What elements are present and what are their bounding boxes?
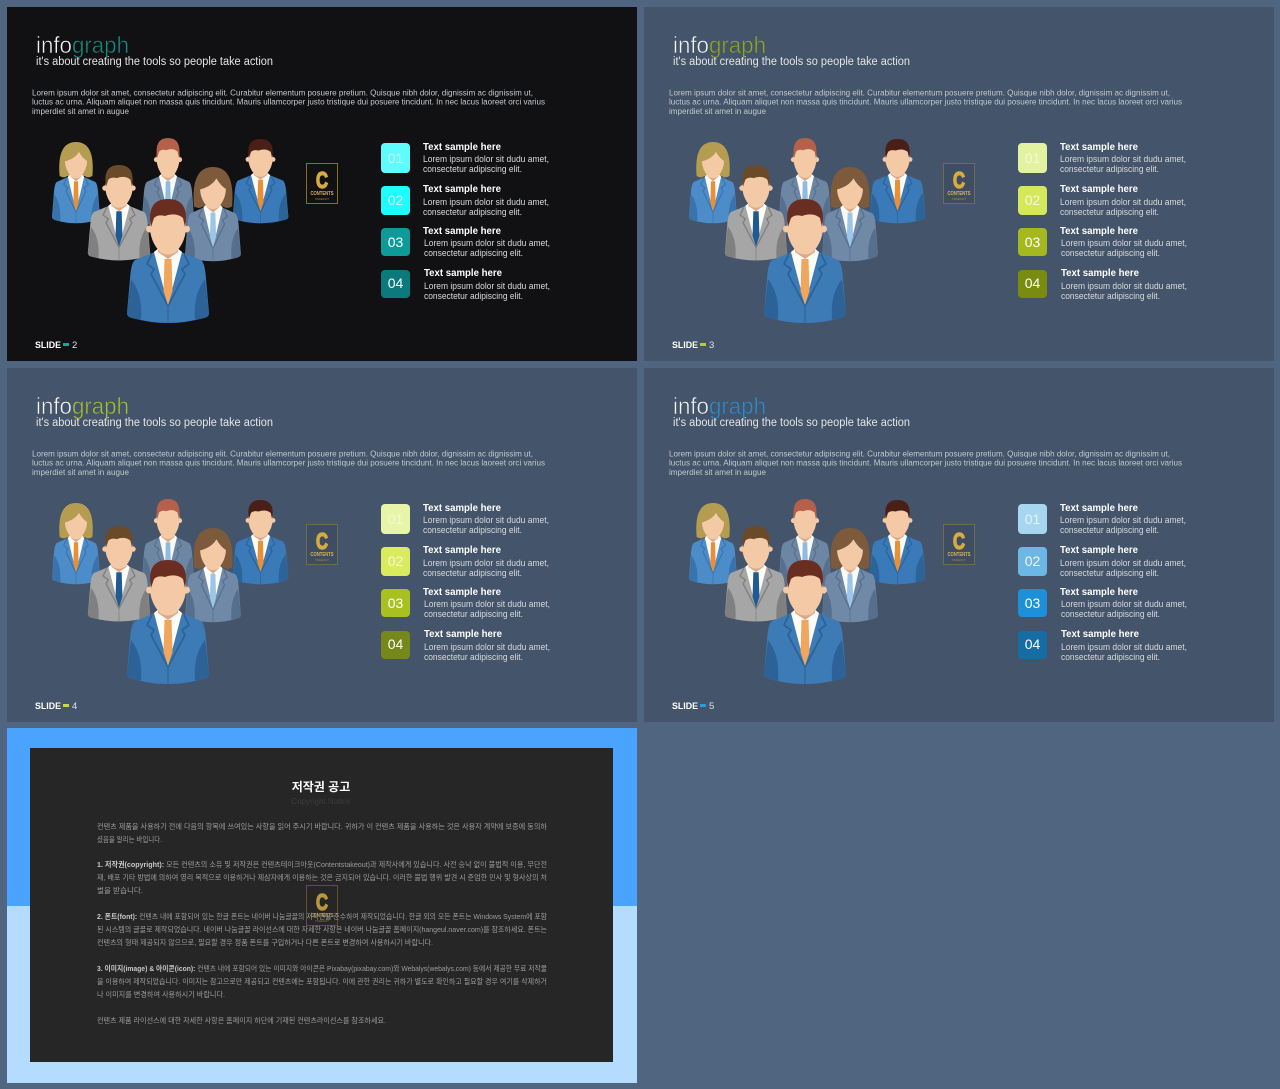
notice clause 3: image and icon: 나 이미지를 변경하여 사용하시기 바랍니다. <box>97 990 225 999</box>
intro paragraph: Lorem ipsum dolor sit amet, consectetur adipiscing elit. Curabitur elementum posuere pretium. Quisque nibh dolor, dignissim ac dignissim ut, <box>669 448 1170 458</box>
list item 04: consectetur adipiscing elit. <box>1061 291 1160 301</box>
subtitle: it's about creating the tools so people take action <box>673 56 910 68</box>
title: infograph <box>36 393 129 419</box>
list item 02: 02 <box>388 553 403 569</box>
icon: contents logo: C <box>316 528 328 554</box>
list item 03: Text sample here <box>423 587 501 598</box>
slide number: 2 <box>72 340 77 351</box>
list item 04: Lorem ipsum dolor sit dudu amet, <box>424 642 550 652</box>
icon: contents logo: TAKEOUT <box>952 558 966 562</box>
panel: slide 2 <box>7 7 637 361</box>
list item 01: Lorem ipsum dolor sit dudu amet, <box>423 515 549 525</box>
list item 04 <box>1018 629 1187 662</box>
list item 01: consectetur adipiscing elit. <box>423 164 522 174</box>
list item 03: consectetur adipiscing elit. <box>1061 248 1160 258</box>
panel: copyright notice slide <box>7 728 637 1083</box>
icon: contents logo watermark: CONTENTS <box>310 913 334 919</box>
notice subheading: Copyright Notice <box>291 797 351 806</box>
list item 03 <box>1018 226 1187 258</box>
title: infograph <box>36 32 129 58</box>
icon: contents logo watermark <box>306 886 338 926</box>
icon: contents logo: CONTENTS <box>948 552 971 558</box>
intro paragraph: imperdiet sit amet in augue <box>669 106 766 116</box>
list item 01: consectetur adipiscing elit. <box>423 525 522 535</box>
icon: contents logo <box>306 524 338 564</box>
intro paragraph: luctus ac urna. Aliquam aliquet non massa quis tincidunt. Mauris ullamcorper justo tristique dui posuere tincidunt. In nec lacus laoreet orci varius <box>32 96 545 106</box>
list item 04: consectetur adipiscing elit. <box>424 652 523 662</box>
list item 02: Text sample here <box>423 545 501 556</box>
list item 02 <box>1018 184 1186 217</box>
list item 02: Lorem ipsum dolor sit dudu amet, <box>1060 558 1186 568</box>
panel: slide 4 <box>7 368 637 722</box>
list item 01: 01 <box>1025 150 1040 166</box>
notice clause 1: copyright <box>97 860 547 895</box>
list item 01: Lorem ipsum dolor sit dudu amet, <box>1060 154 1186 164</box>
list item 03: 03 <box>1025 595 1040 611</box>
list item 04 <box>381 629 550 662</box>
list item 02: consectetur adipiscing elit. <box>1060 568 1159 578</box>
icon: contents logo <box>944 164 974 204</box>
list item 01: consectetur adipiscing elit. <box>1060 164 1159 174</box>
intro paragraph: luctus ac urna. Aliquam aliquet non massa quis tincidunt. Mauris ullamcorper justo tristique dui posuere tincidunt. In nec lacus laoreet orci varius <box>32 458 545 468</box>
list item 01: Text sample here <box>423 142 501 153</box>
notice clause 2: font: 컨텐츠의 형태 제공되지 않으므로, 필요할 경우 정품 폰트를 구입하거나 다른 폰트로 변경하여 사용하시기 바랍니다. <box>97 938 433 947</box>
list item 03: Text sample here <box>423 226 501 237</box>
icon: contents logo watermark: TAKEOUT <box>315 919 329 923</box>
list item 01 <box>381 503 549 535</box>
slide number: 5 <box>709 701 714 712</box>
list item 02: 02 <box>388 192 403 208</box>
slide number: SLIDE <box>35 701 61 712</box>
list item 02: consectetur adipiscing elit. <box>423 568 522 578</box>
notice clause 1: copyright: 벌을 받습니다. <box>97 886 143 895</box>
list item 01 <box>381 142 549 174</box>
list item 03: Lorem ipsum dolor sit dudu amet, <box>1061 238 1187 248</box>
list item 03 <box>381 226 550 258</box>
list item 02: Text sample here <box>1060 184 1138 195</box>
list item 02: Text sample here <box>1060 545 1138 556</box>
intro paragraph <box>32 88 545 116</box>
list item 02 <box>1018 545 1186 578</box>
intro paragraph: Lorem ipsum dolor sit amet, consectetur adipiscing elit. Curabitur elementum posuere pretium. Quisque nibh dolor, dignissim ac dignissim ut, <box>32 88 533 98</box>
slide number <box>672 701 714 712</box>
list item 01: Lorem ipsum dolor sit dudu amet, <box>1060 515 1186 525</box>
list item 04: 04 <box>1025 636 1040 652</box>
notice clause 2: font <box>97 912 547 947</box>
intro paragraph: imperdiet sit amet in augue <box>669 467 766 477</box>
icon: contents logo: TAKEOUT <box>952 197 966 201</box>
intro paragraph: luctus ac urna. Aliquam aliquet non massa quis tincidunt. Mauris ullamcorper justo tristique dui posuere tincidunt. In nec lacus laoreet orci varius <box>669 458 1182 468</box>
list item 03 <box>1018 587 1187 619</box>
list item 03: Lorem ipsum dolor sit dudu amet, <box>424 599 550 609</box>
slide number <box>672 340 714 351</box>
list item 01: consectetur adipiscing elit. <box>1060 525 1159 535</box>
notice footer: 컨텐츠 제품 라이선스에 대한 자세한 사항은 홈페이지 하단에 기재된 컨텐츠라이선스를 참조하세요. <box>97 1016 386 1025</box>
list item 02: 02 <box>1025 192 1040 208</box>
icon: contents logo: TAKEOUT <box>315 197 329 201</box>
list item 02: Text sample here <box>423 184 501 195</box>
notice clause 2: font: 2. 폰트(font): 컨텐츠 내에 포함되어 있는 한글 폰트는 네이버 나눔글꼴의 저작권을 준수하여 제작되었습니다. 한글 외의 모든 폰트는 Windows System에 포함 <box>97 912 547 921</box>
list item 04: 04 <box>388 636 403 652</box>
list item 02 <box>381 184 549 217</box>
title: infograph <box>673 32 766 58</box>
list item 03: consectetur adipiscing elit. <box>424 609 523 619</box>
slide number: SLIDE <box>672 701 698 712</box>
notice heading: 저작권 공고 <box>292 779 350 794</box>
subtitle: it's about creating the tools so people take action <box>673 417 910 429</box>
intro paragraph <box>669 88 1182 116</box>
list item 04: consectetur adipiscing elit. <box>1061 652 1160 662</box>
list item 01: Text sample here <box>1060 503 1138 514</box>
notice clause 3: image and icon: 3. 이미지(image) & 아이콘(icon): 컨텐츠 내에 포함되어 있는 이미지와 아이콘은 Pixabay(pixabay.com)와 Webalys(webalys.com) 등에서 제공한 무료 저작물 <box>97 964 547 973</box>
list item 03: 03 <box>1025 234 1040 250</box>
icon: contents logo: TAKEOUT <box>315 558 329 562</box>
list item 02: consectetur adipiscing elit. <box>1060 207 1159 217</box>
list item 03: Text sample here <box>1060 226 1138 237</box>
intro paragraph <box>32 448 545 477</box>
icon: business people group <box>689 499 925 684</box>
notice clause 3: image and icon <box>97 964 547 999</box>
list item 03 <box>381 587 550 619</box>
slide number: 4 <box>72 701 77 712</box>
list item 03: consectetur adipiscing elit. <box>1061 609 1160 619</box>
intro paragraph: Lorem ipsum dolor sit amet, consectetur adipiscing elit. Curabitur elementum posuere pretium. Quisque nibh dolor, dignissim ac dignissim ut, <box>669 88 1170 98</box>
icon: contents logo: C <box>316 167 328 193</box>
list item 03: Lorem ipsum dolor sit dudu amet, <box>1061 599 1187 609</box>
subtitle: it's about creating the tools so people take action <box>36 56 273 68</box>
list item 04 <box>381 268 550 301</box>
panel: slide 3 <box>644 7 1274 361</box>
intro paragraph: Lorem ipsum dolor sit amet, consectetur adipiscing elit. Curabitur elementum posuere pretium. Quisque nibh dolor, dignissim ac dignissim ut, <box>32 448 533 458</box>
panel: slide 5 <box>644 368 1274 722</box>
list item 04: consectetur adipiscing elit. <box>424 291 523 301</box>
list item 01: 01 <box>388 511 403 527</box>
list item 02: Lorem ipsum dolor sit dudu amet, <box>423 558 549 568</box>
list item 01: Text sample here <box>423 503 501 514</box>
notice intro: 컨텐츠 제품을 사용하기 전에 다음의 항목에 쓰여있는 사항을 읽어 주시기 바랍니다. 귀하가 이 컨텐츠 제품을 사용하는 것은 사용자 계약에 보증에 동의하 <box>97 822 547 831</box>
notice clause 1: copyright: 재, 배포 기타 방법에 의하여 영리 목적으로 이용하거나 제삼자에게 이용하는 것은 금지되어 있습니다. 이러한 불법 행위 발견 시 준엄한 민사 및 형사상의 처 <box>97 873 547 882</box>
list item 01: 01 <box>1025 511 1040 527</box>
list item 04: 04 <box>1025 275 1040 291</box>
slide number: SLIDE <box>35 340 61 351</box>
notice clause 2: font: 된 시스템의 글꼴로 제작되었습니다. 네이버 나눔글꼴 라이선스에 대한 자세한 사항은 네이버 나눔글꼴 홈페이지(hangeul.naver.com)를 참조하세요. 폰트는 <box>97 925 547 934</box>
list item 04: Lorem ipsum dolor sit dudu amet, <box>1061 642 1187 652</box>
slide number: SLIDE <box>672 340 698 351</box>
list item 04: Lorem ipsum dolor sit dudu amet, <box>424 281 550 291</box>
list item 01: Lorem ipsum dolor sit dudu amet, <box>423 154 549 164</box>
icon: contents logo <box>306 164 338 204</box>
list item 03: Text sample here <box>1060 587 1138 598</box>
list item 02: consectetur adipiscing elit. <box>423 207 522 217</box>
notice intro <box>97 822 547 844</box>
icon: contents logo: CONTENTS <box>310 552 334 558</box>
list item 02: Lorem ipsum dolor sit dudu amet, <box>1060 197 1186 207</box>
list item 04: Text sample here <box>1061 629 1139 640</box>
notice clause 3: image and icon: 을 이용하여 제작되었습니다. 이미지는 참고으로만 제공되고 컨텐츠에는 포함됩니다. 이에 관한 권리는 귀하가 별도로 확인하고 필요할 경우 여기를 삭제하거 <box>97 977 547 986</box>
title: infograph <box>673 393 766 419</box>
notice intro: 셨음을 알리는 바입니다. <box>97 835 162 844</box>
slide number <box>35 340 77 351</box>
list item 04: 04 <box>388 275 403 291</box>
list item 01: 01 <box>388 150 403 166</box>
icon: contents logo watermark: C <box>316 889 328 915</box>
list item 04: Text sample here <box>1061 268 1139 279</box>
slide number: 3 <box>709 340 714 351</box>
icon: business people group <box>52 499 288 684</box>
icon: contents logo: C <box>953 167 965 193</box>
icon: contents logo <box>944 524 974 564</box>
list item 04 <box>1018 268 1187 301</box>
list item 03: 03 <box>388 595 403 611</box>
list item 03: 03 <box>388 234 403 250</box>
list item 02: Lorem ipsum dolor sit dudu amet, <box>423 197 549 207</box>
icon: contents logo: CONTENTS <box>948 191 971 197</box>
subtitle: it's about creating the tools so people take action <box>36 417 273 429</box>
list item 04: Text sample here <box>424 629 502 640</box>
list item 01 <box>1018 142 1186 174</box>
list item 02: 02 <box>1025 553 1040 569</box>
icon: business people group <box>52 138 288 323</box>
notice clause 1: copyright: 1. 저작권(copyright): 모든 컨텐츠의 소유 및 저작권은 컨텐츠테이크아웃(Contentstakeout)과 제작사에게 있습니다. 사전 승낙 없이 불법적 이용, 무단전 <box>97 860 547 869</box>
intro paragraph: luctus ac urna. Aliquam aliquet non massa quis tincidunt. Mauris ullamcorper justo tristique dui posuere tincidunt. In nec lacus laoreet orci varius <box>669 96 1182 106</box>
icon: contents logo: CONTENTS <box>310 191 334 197</box>
list item 01 <box>1018 503 1186 535</box>
intro paragraph <box>669 448 1182 477</box>
icon: business people group <box>689 138 925 323</box>
list item 03: consectetur adipiscing elit. <box>424 248 523 258</box>
list item 04: Text sample here <box>424 268 502 279</box>
slide number <box>35 701 77 712</box>
icon: contents logo: C <box>953 528 965 554</box>
intro paragraph: imperdiet sit amet in augue <box>32 106 129 116</box>
intro paragraph: imperdiet sit amet in augue <box>32 467 129 477</box>
list item 01: Text sample here <box>1060 142 1138 153</box>
list item 03: Lorem ipsum dolor sit dudu amet, <box>424 238 550 248</box>
list item 04: Lorem ipsum dolor sit dudu amet, <box>1061 281 1187 291</box>
list item 02 <box>381 545 549 578</box>
